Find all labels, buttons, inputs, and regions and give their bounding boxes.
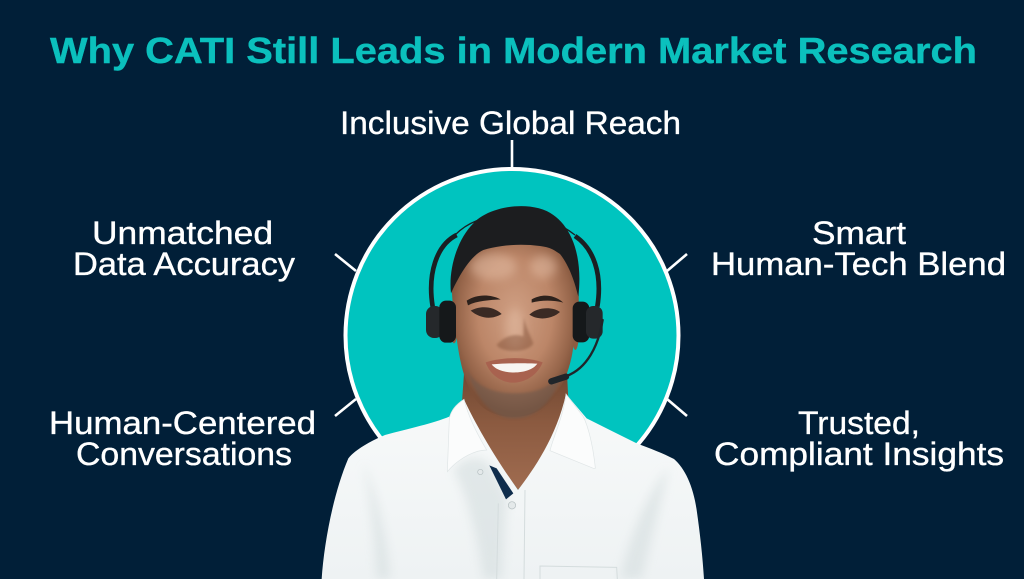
collar left	[447, 399, 487, 472]
label: Human-Centered Conversations: Human-Centered	[49, 405, 316, 441]
label: Unmatched Data Accuracy: Data Accuracy	[73, 246, 295, 282]
label: Smart Human-Tech Blend: Smart	[812, 215, 906, 251]
headband	[431, 213, 599, 307]
shirt	[322, 394, 704, 579]
label: Trusted, Compliant Insights: Compliant Insights	[714, 436, 1004, 472]
label: Trusted, Compliant Insights	[714, 405, 1004, 472]
label: Human-Centered Conversations: Conversations	[76, 436, 292, 472]
mouth	[486, 358, 543, 383]
ear right tip	[571, 303, 579, 350]
eyes	[471, 307, 560, 318]
headset left ear cup	[426, 301, 456, 343]
label: Smart Human-Tech Blend: Human-Tech Blend	[711, 246, 1006, 282]
ear left tip	[450, 307, 458, 343]
label: Smart Human-Tech Blend	[711, 215, 1006, 282]
person with headset	[322, 206, 704, 579]
face	[452, 228, 579, 417]
title: Why CATI Still Leads in Modern Market Research	[50, 30, 977, 71]
collar right	[550, 394, 595, 468]
headset right ear cup	[573, 302, 603, 342]
shirt placket and pocket lines	[497, 490, 617, 579]
shirt shading	[363, 458, 668, 579]
connector ticks	[335, 140, 687, 416]
label: Human-Centered Conversations	[49, 405, 316, 472]
hair	[451, 206, 579, 297]
neck	[462, 367, 568, 490]
beard shadow	[467, 370, 563, 418]
headset microphone boom	[551, 320, 603, 381]
teal circle with white ring	[346, 169, 678, 502]
eyebrows	[467, 295, 563, 305]
label: Inclusive Global Reach: Inclusive Global Reach	[340, 105, 681, 141]
label: Unmatched Data Accuracy	[73, 215, 295, 282]
face highlights	[470, 253, 557, 350]
nose shadow	[497, 317, 533, 351]
label: Unmatched Data Accuracy: Unmatched	[92, 215, 273, 251]
shirt buttons	[478, 469, 516, 509]
inner shirt stripe	[489, 465, 513, 499]
label: Trusted, Compliant Insights: Trusted,	[798, 405, 920, 441]
